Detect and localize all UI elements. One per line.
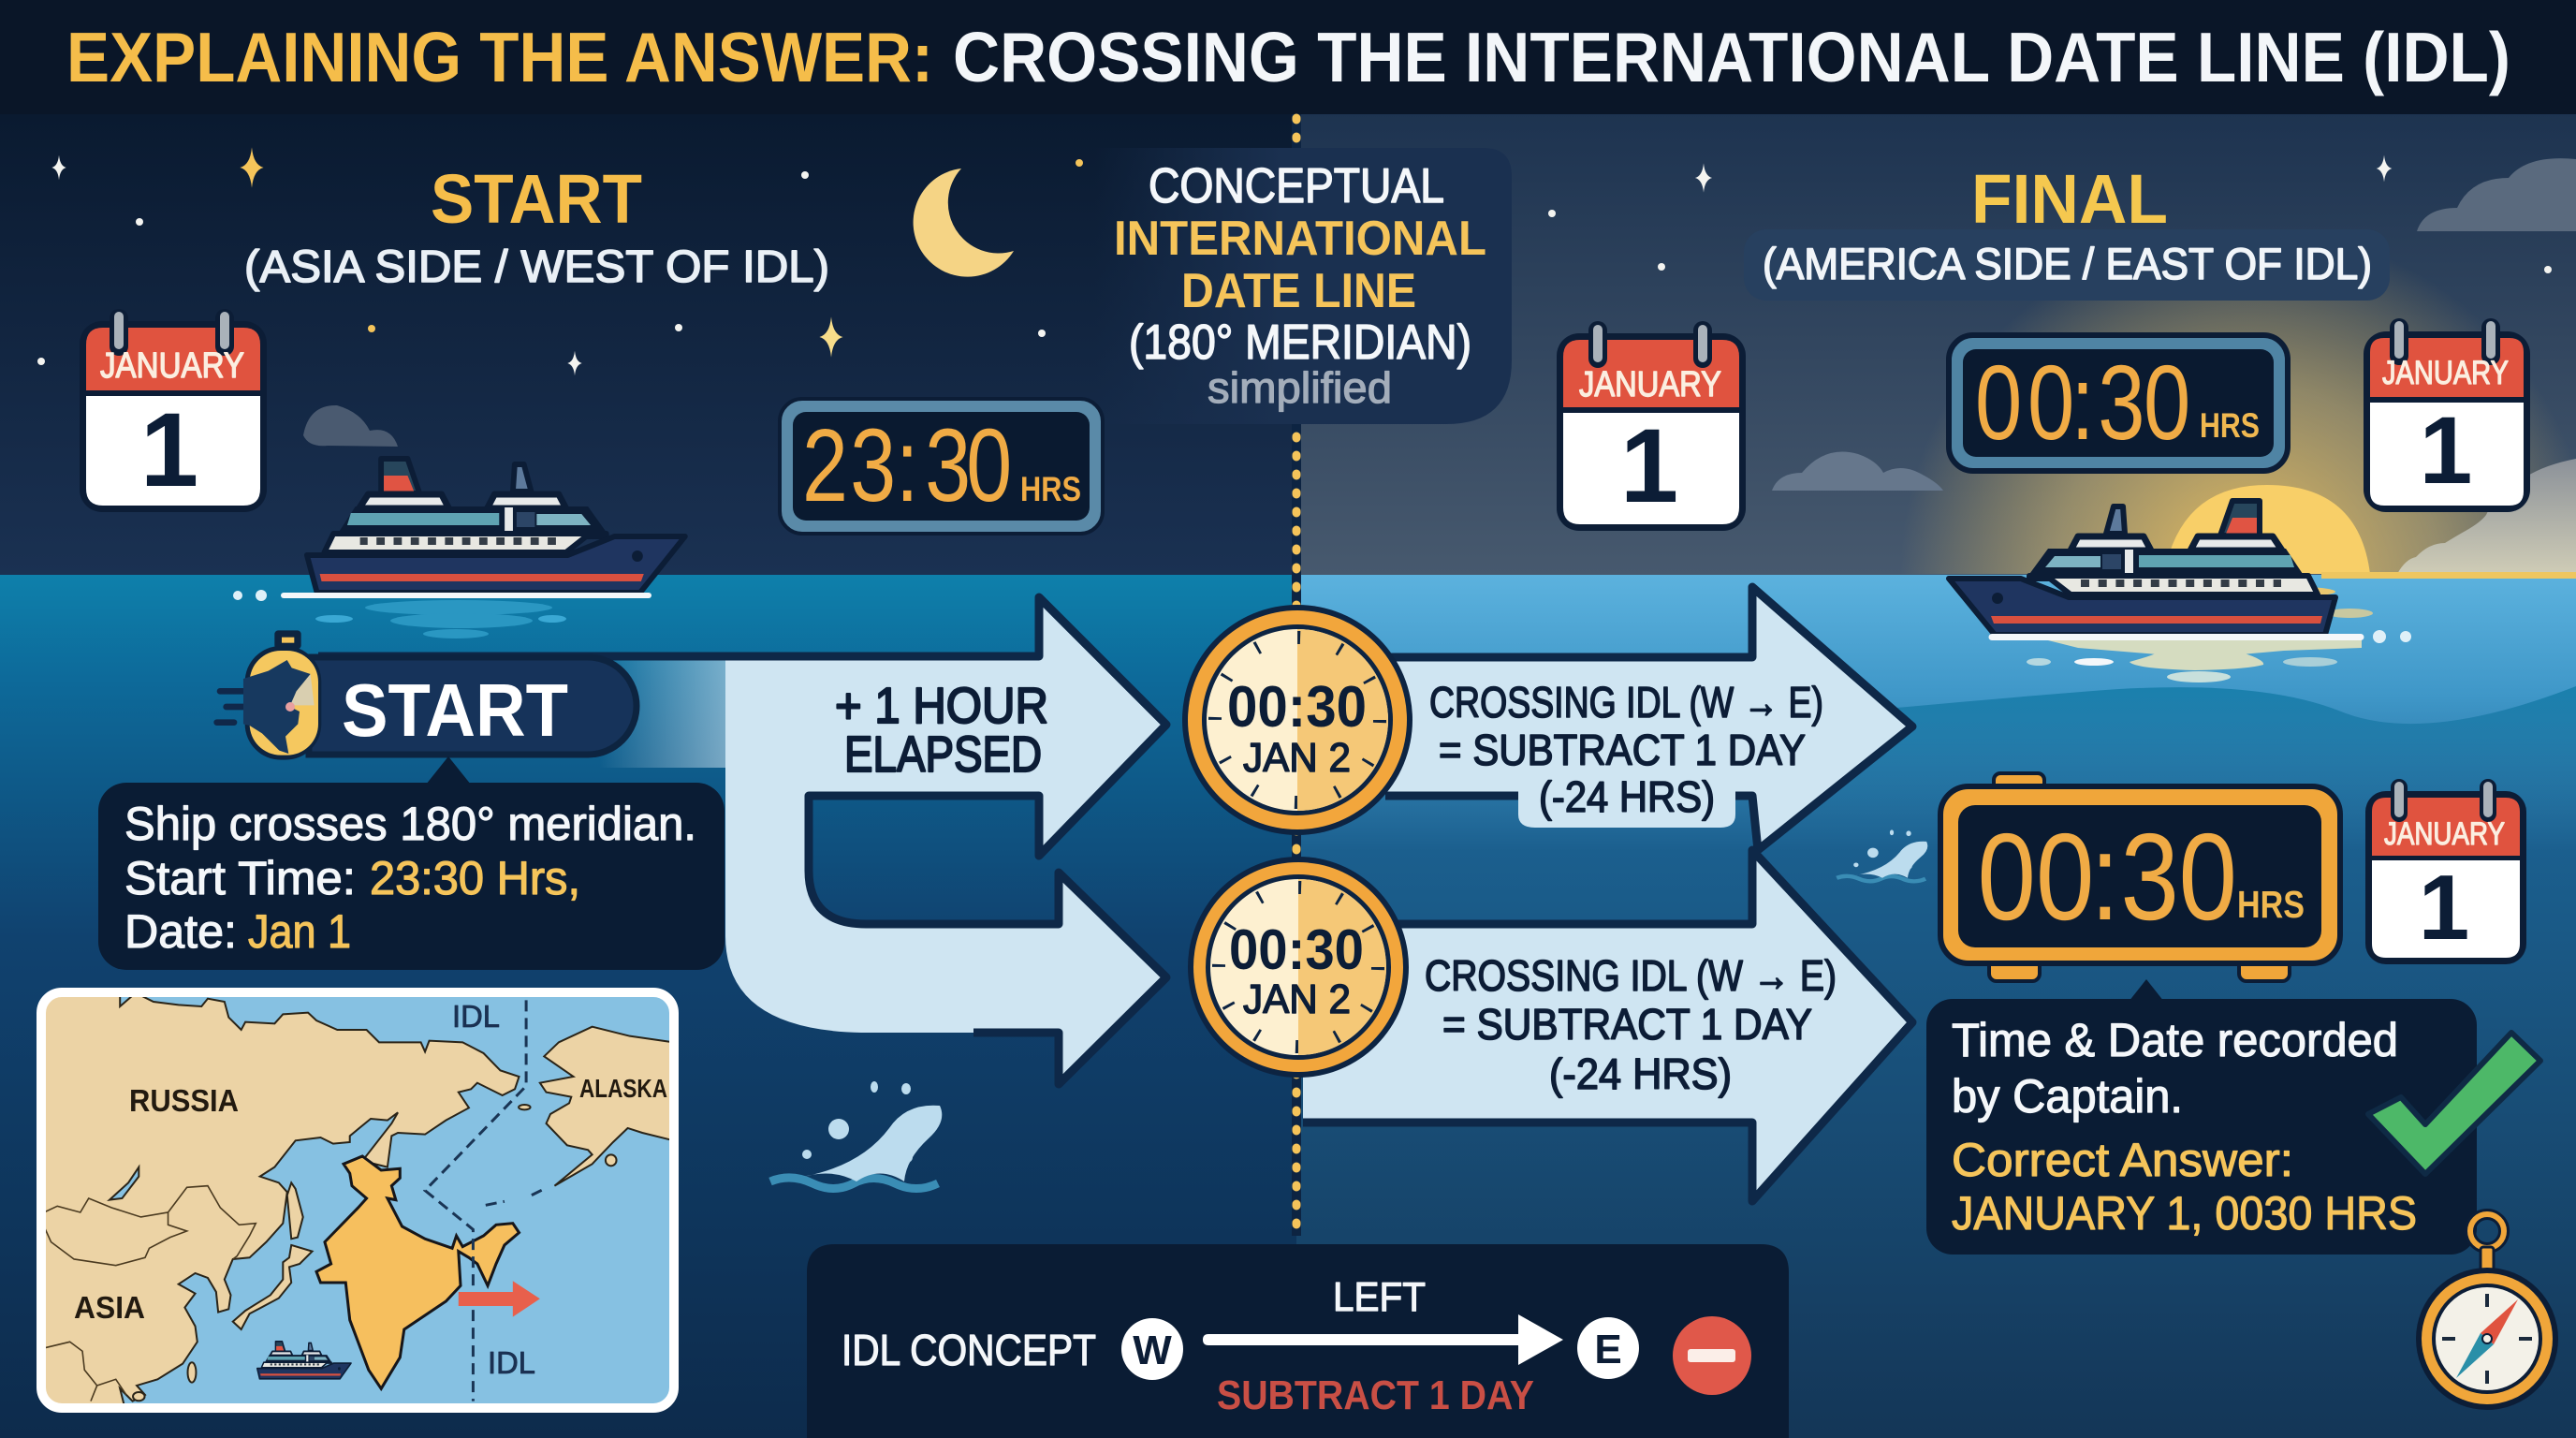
panel: IDL concept: LEFT <box>1333 1274 1426 1320</box>
background: east ocean <box>1296 575 2576 1438</box>
arrow text: +1 hour elapsed: ELAPSED <box>844 726 1042 783</box>
panel: conceptual international date line: (180° MERIDIAN) <box>1129 315 1471 370</box>
background: west ocean <box>0 575 1296 1438</box>
callout: ship crosses meridian: 23:30 Hrs, <box>370 852 580 904</box>
callout: time and date recorded, correct answer: Correct Answer: <box>1952 1134 2293 1186</box>
callout: ship crosses meridian: Date: <box>124 905 237 958</box>
ship: east <box>1949 501 2411 682</box>
start pill <box>309 657 637 755</box>
panel: conceptual international date line: DATE LINE <box>1181 264 1416 318</box>
arrow text: crossing upper: = SUBTRACT 1 DAY <box>1439 726 1806 774</box>
map land: India highlighted <box>316 1156 520 1388</box>
stars: east sky <box>1548 155 2552 273</box>
arrow text: crossing lower: CROSSING IDL (W → E) <box>1425 951 1837 1000</box>
calendar: east, January 1 <box>1557 321 1746 531</box>
digital clock: 00:30 <box>1949 335 2288 471</box>
background: east dawn sky <box>1296 112 2576 575</box>
icon: rising sun <box>2164 485 2576 579</box>
arrow text: crossing upper: CROSSING IDL (W → E) <box>1429 678 1823 726</box>
callout: ship crosses meridian <box>98 756 724 970</box>
calendar: west, January 1: 1 <box>140 391 198 508</box>
calendar: east far, January 1 <box>2364 318 2530 512</box>
icon: compass <box>2416 1214 2558 1410</box>
calendar: west, January 1 <box>80 309 267 512</box>
icon: water splash, large <box>770 1081 942 1189</box>
digital clock: 00:30: HRS <box>2200 406 2260 445</box>
arrow: crossing IDL, lower <box>1303 850 1912 1201</box>
callout: time and date recorded, correct answer: Time & Date recorded <box>1952 1014 2398 1066</box>
arrow: +1 hour and return branch <box>318 597 1166 1084</box>
icon: crescent moon <box>914 169 1014 277</box>
map: dashed date line <box>425 1000 544 1401</box>
panel: conceptual international date line: CONCEPTUAL <box>1149 159 1444 213</box>
panel: conceptual international date line <box>1095 148 1512 424</box>
map: mini ship <box>257 1342 351 1379</box>
digital clock: 00:30: 00:30 <box>1975 343 2190 462</box>
map land: Alaska <box>538 1026 669 1187</box>
title bar <box>0 0 2576 114</box>
analog clock: 00:30 Jan 2, upper: JAN 2 <box>1243 735 1351 781</box>
callout: time and date recorded, correct answer <box>1926 979 2477 1255</box>
calendar: east far, January 1: 1 <box>2420 397 2472 504</box>
dotted international date line <box>1292 114 1301 1236</box>
subheading: america side: (AMERICA SIDE / EAST OF IDL) <box>1763 239 2372 288</box>
map land: Russia and Asia <box>28 983 520 1414</box>
stars: west sky <box>37 147 1083 375</box>
ship: west <box>233 459 685 638</box>
callout: time and date recorded, correct answer: JANUARY 1, 0030 HRS <box>1952 1187 2417 1240</box>
map geography <box>46 997 669 1403</box>
calendar: east, January 1: JANUARY <box>1579 365 1721 404</box>
map labels: ASIA <box>74 1290 145 1325</box>
background: west night sky <box>0 112 1296 575</box>
callout: ship crosses meridian: Start Time: <box>124 852 356 904</box>
icon: water splash, small <box>1837 829 1927 881</box>
west smoke cloud <box>303 405 398 447</box>
panel: IDL concept: E <box>1594 1327 1622 1372</box>
panel: IDL concept: SUBTRACT 1 DAY <box>1217 1372 1534 1418</box>
analog clock: 00:30 Jan 2, upper: 00:30 <box>1227 675 1367 740</box>
map labels <box>74 999 667 1380</box>
analog clock: 00:30 Jan 2, lower: 00:30 <box>1229 918 1364 981</box>
digital clock: 23:30: 23:30 <box>802 409 1012 523</box>
map labels: ALASKA <box>579 1074 667 1103</box>
sun glow <box>1915 273 2559 574</box>
panel: IDL concept <box>807 1244 1789 1438</box>
east ocean wave <box>1760 686 2576 861</box>
panel: IDL concept: W <box>1133 1328 1172 1373</box>
map labels: RUSSIA <box>129 1083 239 1118</box>
panel: IDL concept: IDL CONCEPT <box>842 1326 1096 1374</box>
analog clock: 00:30 Jan 2, lower: JAN 2 <box>1243 976 1351 1022</box>
alarm clock: 00:30 result: HRS <box>2237 883 2305 926</box>
arrow: crossing IDL, upper <box>1385 587 1912 850</box>
alarm clock: 00:30 result <box>1940 773 2340 981</box>
heading: final: FINAL <box>1971 160 2168 238</box>
calendar: west, January 1: JANUARY <box>100 346 244 386</box>
title bar: EXPLAINING THE ANSWER: <box>66 18 933 96</box>
icon: stopwatch with speed lines <box>217 630 321 760</box>
icon: green check mark <box>2368 1033 2540 1174</box>
arrow text: crossing upper <box>1429 678 1823 821</box>
calendar: east, January 1: 1 <box>1620 407 1678 524</box>
heading: start: START <box>431 160 642 238</box>
map land: Baikal, Sakhalin, islands <box>110 1105 617 1401</box>
callout: ship crosses meridian: Jan 1 <box>248 905 351 958</box>
alarm clock: 00:30 result: 00:30 <box>1977 807 2237 946</box>
arrow text: crossing upper: (-24 HRS) <box>1539 772 1715 821</box>
digital clock: 23:30 <box>780 399 1103 534</box>
digital clock: 23:30: HRS <box>1020 470 1081 508</box>
analog clock: 00:30 Jan 2, lower <box>1188 857 1409 1078</box>
map: red direction arrow <box>459 1281 540 1317</box>
subheading: america side <box>1744 229 2390 301</box>
map: Asia and IDL <box>28 983 696 1414</box>
arrow text: crossing lower: (-24 HRS) <box>1549 1049 1732 1098</box>
map labels: IDL <box>488 1345 535 1380</box>
calendar: final result, January 1 <box>2365 779 2526 964</box>
calendar: final result, January 1: JANUARY <box>2384 816 2505 852</box>
subheading: asia side: (ASIA SIDE / WEST OF IDL) <box>244 242 829 292</box>
arrow text: crossing lower: = SUBTRACT 1 DAY <box>1442 1000 1812 1049</box>
clouds: east sky <box>1772 158 2576 574</box>
callout: ship crosses meridian: Ship crosses 180° meridian. <box>124 798 696 850</box>
panel: conceptual international date line: INTERNATIONAL <box>1114 212 1486 266</box>
map labels: IDL <box>452 999 500 1034</box>
arrow text: crossing lower <box>1425 951 1837 1098</box>
callout: time and date recorded, correct answer: by Captain. <box>1952 1070 2183 1123</box>
arrow text: +1 hour elapsed <box>835 678 1048 783</box>
map borders: Mongolia and China <box>44 1186 256 1401</box>
panel: conceptual international date line: simplified <box>1208 363 1392 412</box>
calendar: final result, January 1: 1 <box>2419 856 2469 959</box>
arrow text: +1 hour elapsed: + 1 HOUR <box>835 678 1048 734</box>
map border <box>41 992 674 1408</box>
analog clock: 00:30 Jan 2, upper <box>1182 605 1412 835</box>
start pill: START <box>342 668 568 752</box>
calendar: east far, January 1: JANUARY <box>2382 355 2509 391</box>
